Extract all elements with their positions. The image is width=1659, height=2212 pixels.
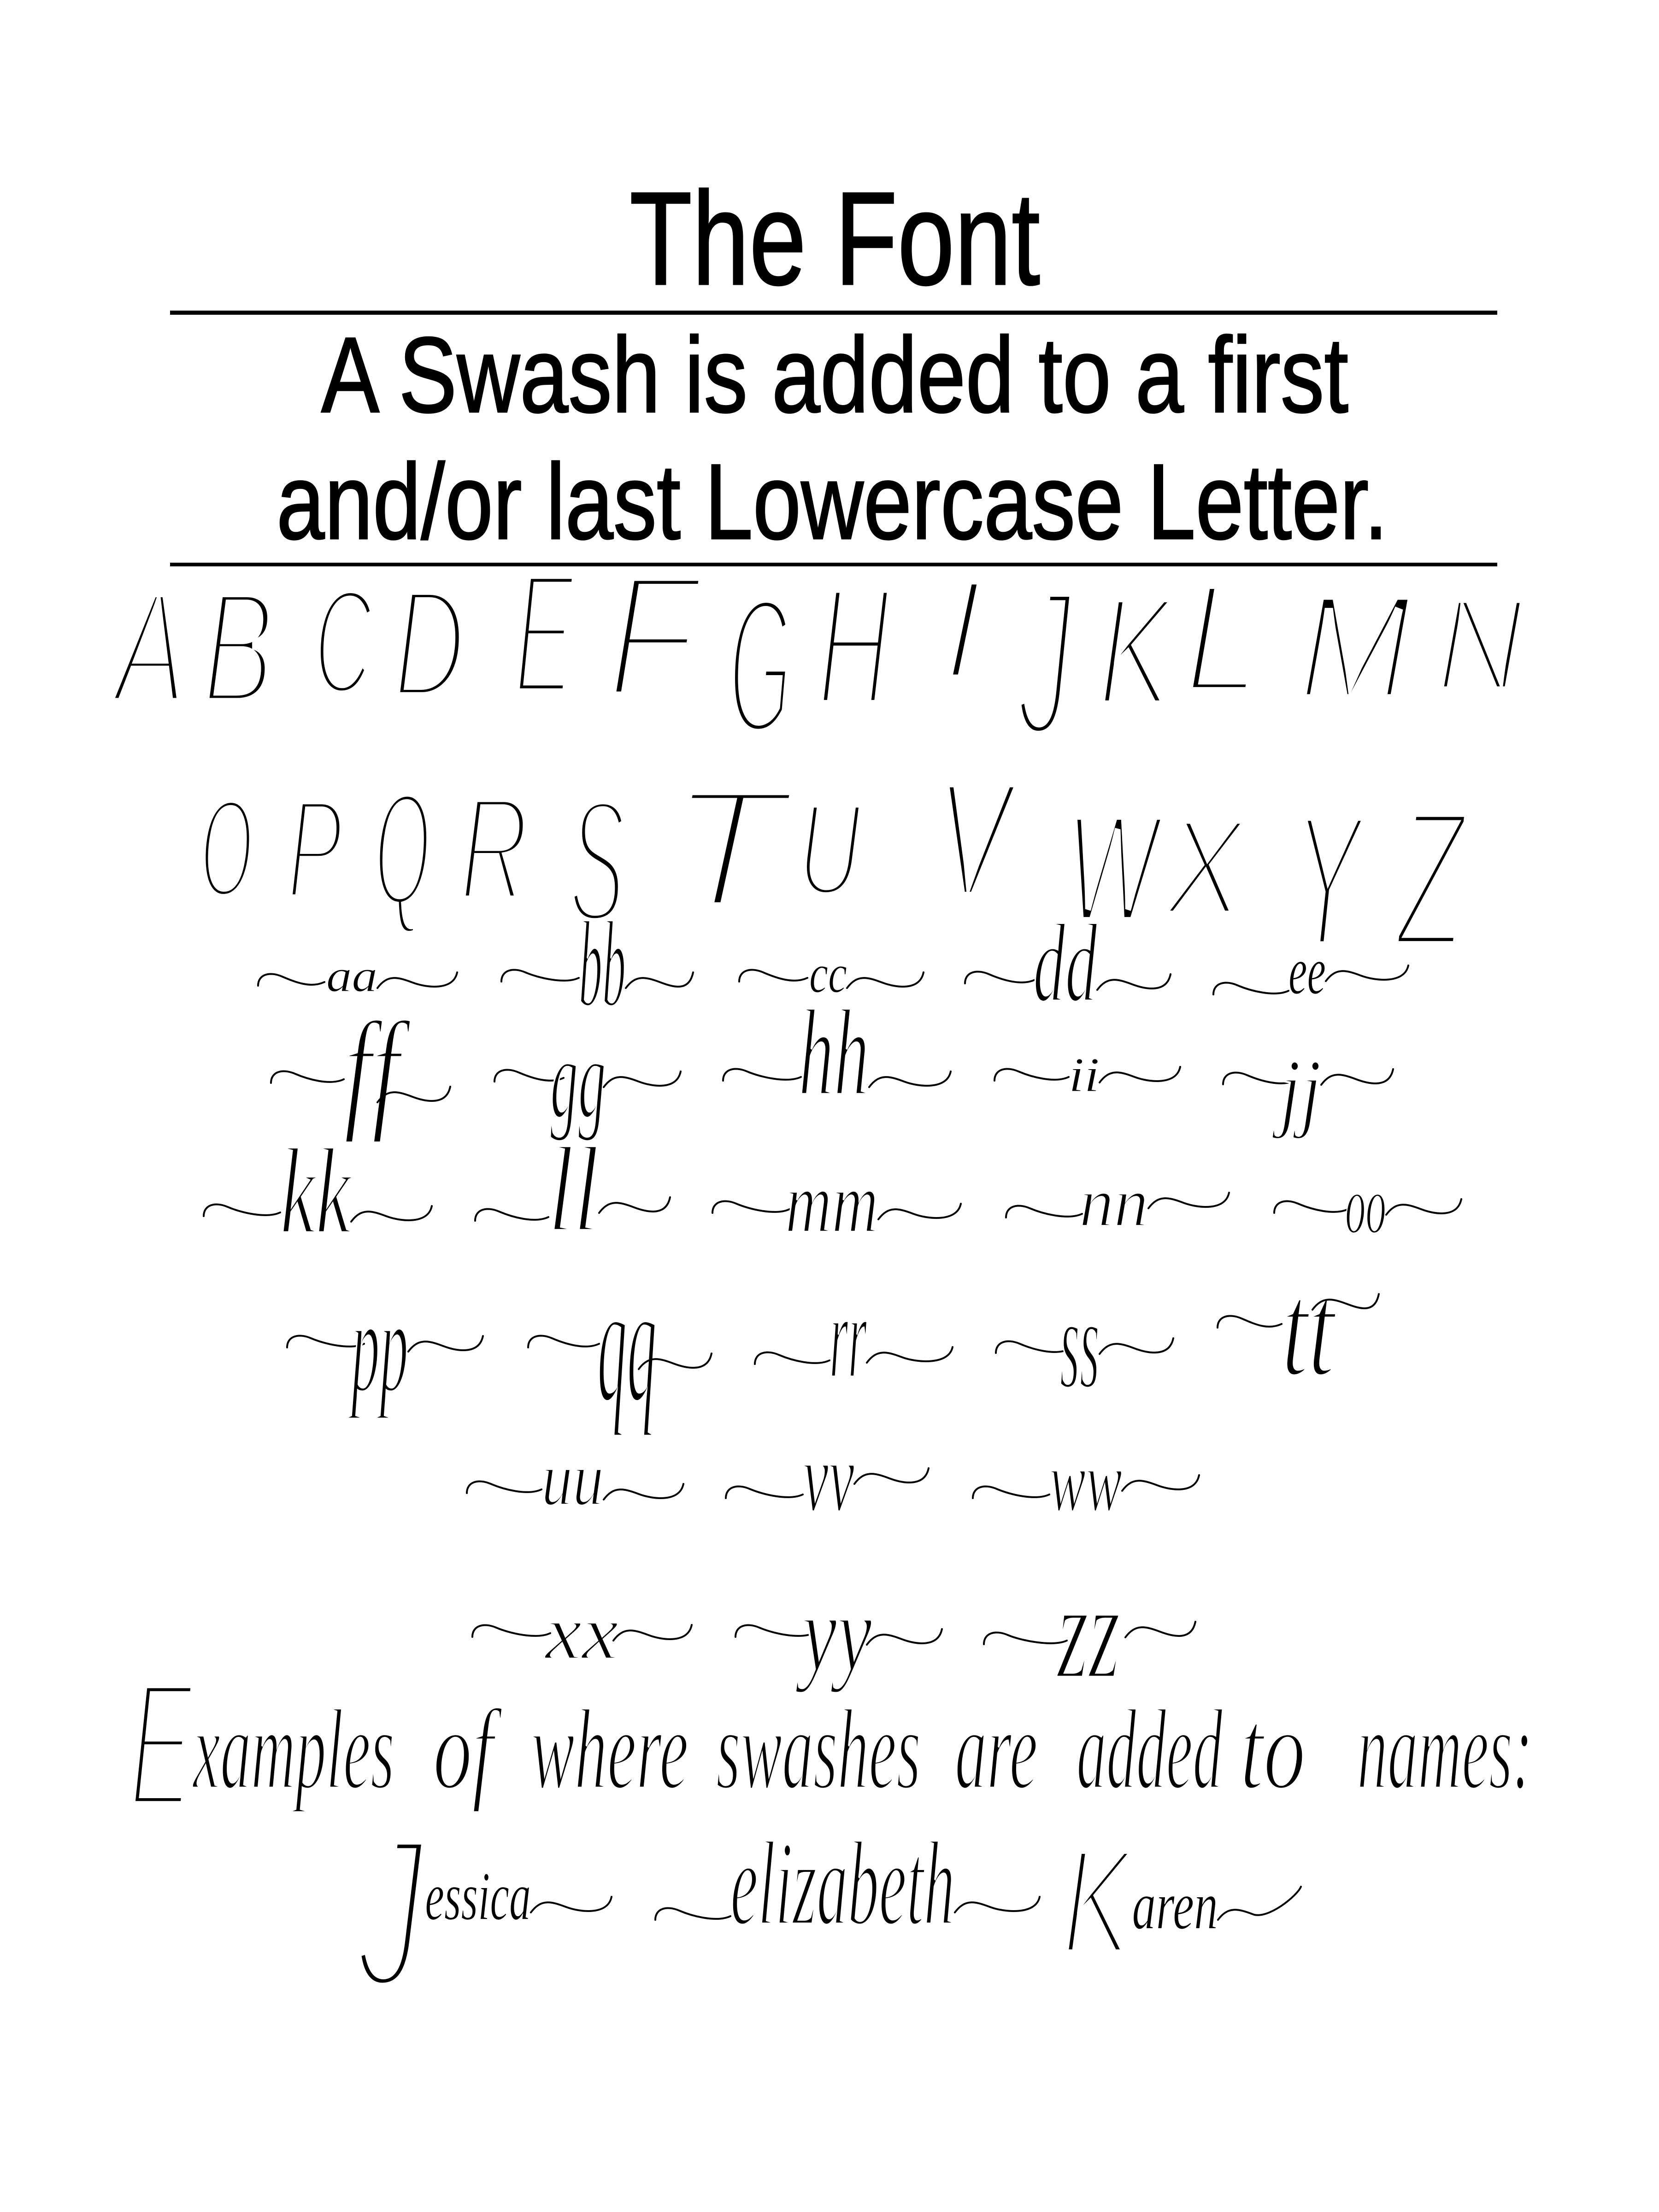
examples caption: are (955, 1686, 1038, 1813)
uppercase alphabet row A to N: A (108, 558, 186, 737)
uppercase alphabet row O to Z (200, 746, 1468, 989)
cc pair (739, 943, 924, 1004)
xx pair: xx (544, 1589, 618, 1676)
ff pair (271, 994, 450, 1144)
uppercase alphabet row A to N: J (1016, 545, 1074, 780)
examples caption (129, 1644, 1533, 1845)
lowercase row x to z with swashes (472, 1554, 1195, 1707)
bb pair: bb (579, 895, 626, 1032)
mm pair: mm (785, 1154, 878, 1251)
nn pair (1006, 1164, 1229, 1241)
subtitle: A Swash is added to a first (321, 315, 1348, 435)
ii pair (994, 1048, 1180, 1102)
name: elizabeth (655, 1817, 1040, 1950)
examples caption: E (129, 1644, 195, 1845)
ss pair (996, 1271, 1173, 1416)
vv pair: vv (803, 1422, 854, 1533)
yy pair: yy (795, 1572, 872, 1694)
tt pair (1218, 1255, 1379, 1404)
aa pair (258, 950, 457, 1001)
uppercase alphabet row O to Z: O (200, 770, 253, 927)
lowercase row u to w with swashes (467, 1422, 1199, 1533)
ww pair (973, 1433, 1199, 1530)
uppercase alphabet row O to Z: U (798, 775, 862, 924)
uppercase alphabet row O to Z: Q (374, 758, 431, 940)
uppercase alphabet row O to Z: Z (1393, 768, 1468, 989)
uppercase alphabet row O to Z: R (459, 766, 529, 932)
subtitle: and/or last Lowercase Letter. (276, 442, 1388, 562)
rr pair (755, 1271, 953, 1403)
jj pair (1223, 1041, 1393, 1140)
gg pair (494, 1015, 681, 1142)
name: elizabeth: elizabeth (730, 1817, 955, 1950)
kk pair (204, 1123, 432, 1259)
uppercase alphabet row A to N: C (314, 558, 373, 726)
ff pair: ff (344, 994, 412, 1144)
uppercase alphabet row A to N: E (514, 536, 576, 731)
ww pair: ww (1049, 1433, 1122, 1530)
examples caption: added (1077, 1686, 1223, 1813)
uppercase alphabet row A to N: N (1436, 571, 1525, 719)
hh pair: hh (799, 984, 869, 1122)
example names (355, 1791, 1301, 2033)
ee pair (1213, 933, 1408, 1009)
uppercase alphabet row A to N: L (1184, 550, 1260, 725)
oo pair (1274, 1159, 1461, 1251)
examples caption: to (1240, 1686, 1306, 1813)
lowercase row a to e with swashes (258, 895, 1408, 1032)
mm pair (712, 1154, 961, 1251)
uppercase alphabet row A to N: K (1098, 564, 1178, 738)
vv pair (726, 1422, 929, 1533)
dd pair (965, 900, 1171, 1025)
lowercase row f to j with swashes (271, 984, 1393, 1144)
yy pair (735, 1572, 942, 1694)
uu pair: uu (541, 1436, 604, 1522)
examples caption: of (433, 1686, 503, 1813)
dd pair: dd (1033, 900, 1098, 1025)
pp pair (287, 1272, 483, 1420)
uppercase alphabet row A to N: I (941, 549, 984, 709)
uppercase alphabet row A to N: F (606, 537, 706, 734)
uu pair (467, 1436, 683, 1522)
aa pair: aa (326, 950, 377, 1001)
uppercase alphabet row O to Z: V (936, 746, 1020, 932)
ii pair: ii (1069, 1048, 1100, 1102)
uppercase alphabet row O to Z: S (569, 763, 625, 959)
uppercase alphabet row A to N (108, 536, 1525, 780)
zz pair: zz (1056, 1554, 1120, 1707)
examples caption: xamples (192, 1686, 394, 1813)
uppercase alphabet row O to Z: W (1066, 782, 1165, 955)
uppercase alphabet row O to Z: X (1161, 789, 1248, 944)
name: Karen (1062, 1816, 1301, 1986)
examples caption: where (531, 1686, 688, 1813)
name: Jessica: essica (425, 1858, 531, 1935)
cc pair: cc (809, 943, 847, 1004)
uppercase alphabet row O to Z: T (668, 753, 796, 944)
uppercase alphabet row O to Z: Y (1292, 774, 1368, 988)
zz pair (984, 1554, 1195, 1707)
name: Jessica (355, 1791, 612, 2033)
gg pair: gg (550, 1015, 606, 1142)
examples caption: swashes (716, 1686, 921, 1813)
uppercase alphabet row A to N: D (394, 557, 465, 730)
lowercase row k to o with swashes (204, 1122, 1461, 1259)
hh pair (723, 984, 951, 1122)
uppercase alphabet row A to N: M (1298, 563, 1414, 731)
nn pair: nn (1079, 1164, 1148, 1241)
ee pair: ee (1288, 933, 1326, 1009)
uppercase alphabet row O to Z: P (287, 769, 343, 929)
qq pair (528, 1249, 712, 1438)
uppercase alphabet row A to N: H (817, 551, 892, 741)
ss pair: ss (1060, 1271, 1100, 1416)
name: Karen: K (1062, 1816, 1137, 1986)
qq pair: qq (597, 1249, 657, 1438)
ll pair: ll (548, 1122, 599, 1257)
name: Jessica: J (355, 1791, 427, 2033)
tt pair: tt (1282, 1255, 1338, 1404)
subtitle (276, 315, 1388, 562)
title: The Font (629, 165, 1041, 313)
jj pair: jj (1271, 1041, 1321, 1140)
ll pair (475, 1122, 670, 1257)
pp pair: pp (347, 1272, 408, 1420)
oo pair: oo (1345, 1159, 1386, 1251)
uppercase alphabet row A to N: G (729, 557, 792, 774)
name: Karen: aren (1132, 1867, 1218, 1944)
lowercase row p to t with swashes (287, 1249, 1379, 1438)
uppercase alphabet row A to N: B (202, 558, 274, 737)
bb pair (501, 895, 693, 1032)
rr pair: rr (830, 1271, 868, 1403)
xx pair (472, 1589, 692, 1676)
kk pair: kk (280, 1123, 353, 1259)
